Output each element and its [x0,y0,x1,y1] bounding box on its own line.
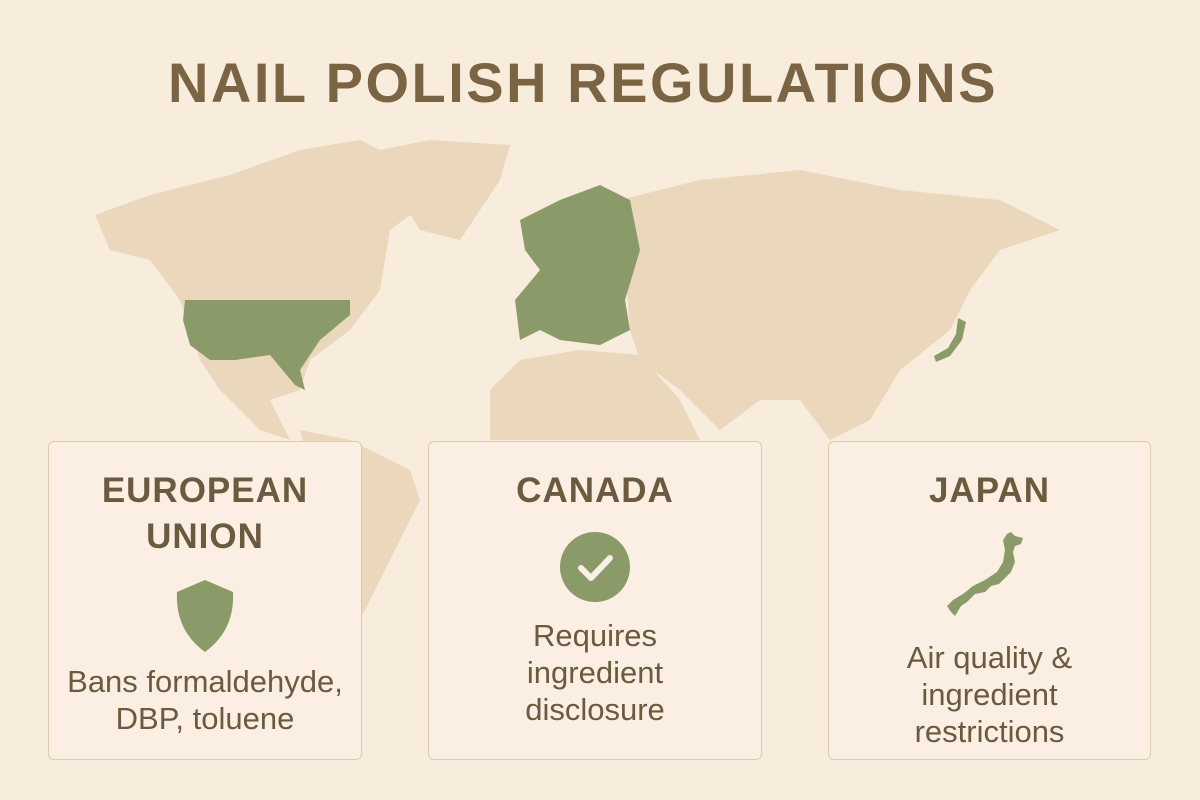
heading: EU: UNION [146,517,264,556]
Japan on map [934,318,966,362]
text: EU: DBP, toluene [116,701,294,736]
title: NAIL POLISH REGULATIONS [168,51,998,114]
panel: canada [428,441,762,760]
text: japan: ingredient [921,677,1058,712]
heading: EU [102,471,308,556]
heading: japan: JAPAN [929,471,1050,510]
icon: shield [176,580,234,652]
text: canada [525,618,665,727]
panel: japan [828,441,1151,760]
heading: EU: EUROPEAN [102,471,308,510]
text: japan [906,640,1072,749]
text: japan: restrictions [915,714,1064,749]
Europe [515,185,640,345]
heading: canada: CANADA [516,471,674,510]
text: canada: disclosure [525,692,665,727]
text: EU [67,664,343,736]
text: EU: Bans formaldehyde, [67,664,343,699]
text: canada: Requires [533,618,657,653]
text: canada: ingredient [527,655,663,690]
text: japan: Air quality & [907,640,1072,675]
icon: japan map [947,532,1023,616]
panel: european union [48,441,362,760]
USA [183,300,350,390]
icon: check circle [560,532,630,602]
